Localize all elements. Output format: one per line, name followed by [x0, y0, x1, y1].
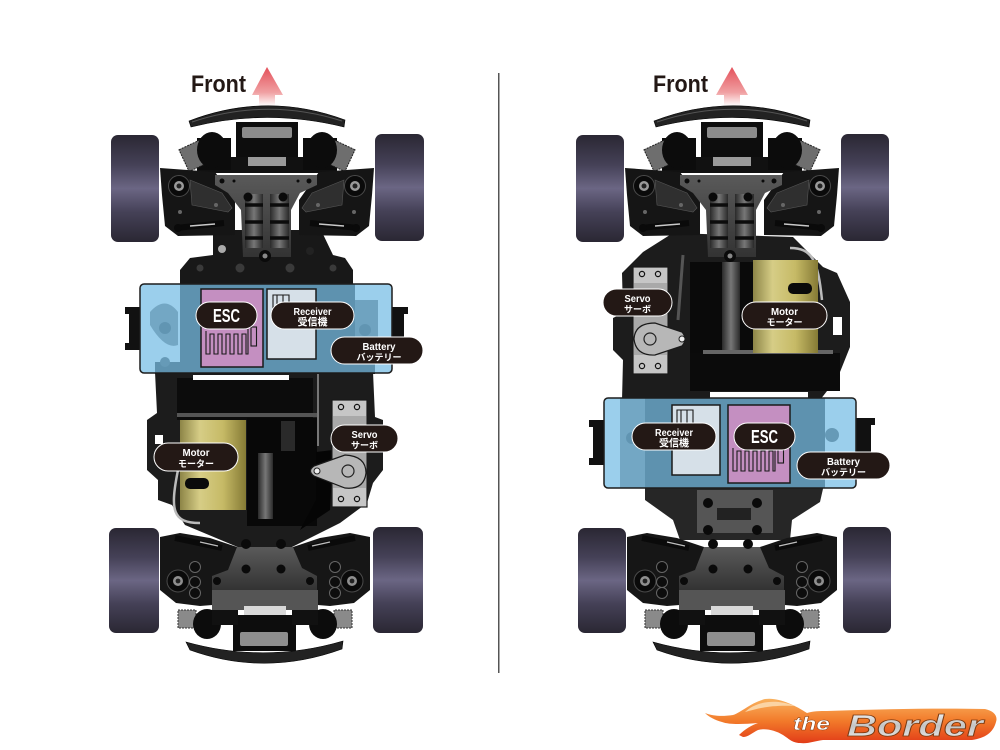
front suspension	[625, 106, 839, 262]
label: Motor: モーター	[178, 458, 214, 469]
label: Motor	[154, 443, 238, 471]
lower chassis	[620, 470, 825, 540]
label: Motor: Motor	[771, 307, 798, 318]
wheel: rear left	[578, 528, 626, 633]
side battery clips	[589, 418, 875, 465]
label: Servo	[603, 289, 672, 316]
heading: Front left: Front	[191, 71, 246, 98]
centre plate box	[697, 490, 773, 535]
chassis body	[613, 233, 850, 400]
label: Battery: バッテリー	[356, 352, 402, 362]
label: Servo: Servo	[624, 294, 650, 305]
ESC box	[728, 405, 790, 483]
label: Receiver: Receiver	[655, 428, 693, 439]
wheel: rear right	[843, 527, 891, 633]
battery underlay	[150, 284, 378, 374]
label: ESC	[734, 423, 795, 450]
battery underlay	[620, 398, 839, 488]
gearbox block	[177, 372, 333, 530]
label: Servo: サーボ	[351, 440, 378, 450]
logo: the Border flame	[705, 699, 997, 743]
heading: Front right: Front	[653, 71, 708, 98]
centre drivetrain	[678, 255, 840, 398]
label: Receiver: 受信機	[298, 316, 328, 328]
wheel: front right	[841, 134, 889, 241]
divider between layouts	[498, 73, 500, 673]
label: Battery: Battery	[827, 457, 860, 468]
wheel: front left	[111, 135, 159, 242]
arrow: front direction right	[716, 67, 748, 106]
receiver box	[672, 405, 720, 475]
chassis rail hole	[155, 435, 163, 444]
panel: battery overlay	[604, 398, 856, 488]
label: Motor	[742, 302, 827, 329]
label: ESC: ESC	[213, 306, 240, 326]
servo	[310, 400, 367, 507]
label: Servo: サーボ	[624, 304, 651, 314]
label: Receiver: 受信機	[659, 436, 689, 450]
panel: left chassis layout	[109, 67, 424, 663]
wheel: front left	[576, 135, 624, 242]
chassis body	[147, 372, 383, 548]
rear suspension	[627, 533, 837, 663]
label: Receiver: Receiver	[294, 307, 332, 318]
wire	[174, 470, 200, 523]
side battery clips	[125, 307, 408, 350]
label: Servo	[331, 425, 398, 452]
label: Battery: バッテリー	[821, 468, 866, 478]
wheel: rear right	[373, 527, 423, 633]
arrow: front direction left	[252, 67, 283, 106]
label: Battery	[797, 452, 890, 479]
panel: right chassis layout	[576, 67, 891, 663]
label: Motor: モーター	[766, 316, 803, 328]
label: Battery: Battery	[362, 342, 396, 353]
wire	[790, 248, 822, 300]
label: Battery	[331, 337, 423, 364]
label: Servo: Servo	[352, 430, 378, 441]
label: Receiver	[271, 302, 354, 329]
panel: battery overlay	[140, 284, 392, 373]
wheel: front right	[375, 134, 424, 241]
gap under battery	[193, 375, 289, 380]
chassis rail hole	[833, 317, 842, 335]
label: Receiver	[632, 423, 716, 450]
motor	[753, 260, 818, 353]
logo: the Border flame: the	[793, 714, 830, 734]
label: ESC: ESC	[751, 427, 778, 447]
front suspension	[160, 106, 374, 262]
logo: the Border flame: Border	[847, 708, 986, 743]
label: Motor: Motor	[182, 448, 210, 459]
receiver box	[267, 289, 316, 359]
front chassis neck	[180, 230, 353, 292]
ESC box	[201, 289, 263, 367]
servo	[633, 267, 685, 374]
motor	[180, 420, 246, 510]
wheel: rear left	[109, 528, 159, 633]
rear suspension	[160, 533, 370, 663]
label: ESC	[196, 302, 257, 329]
